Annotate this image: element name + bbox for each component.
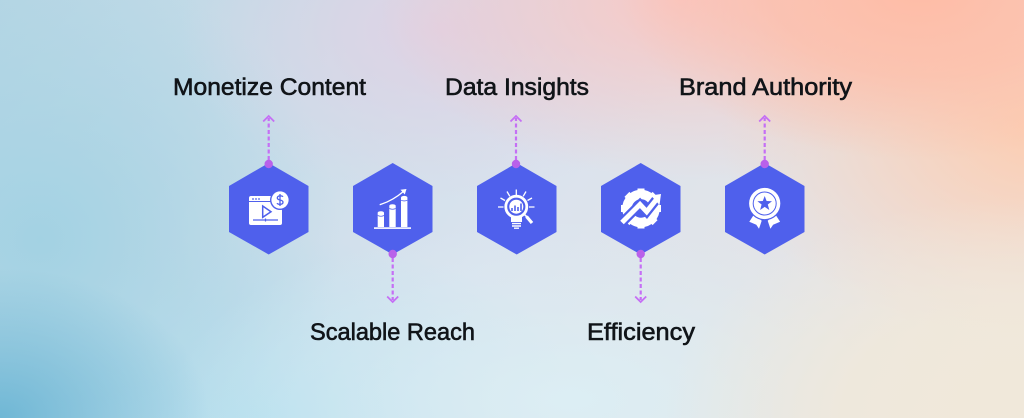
hexagon: Monetize Content: [229, 163, 308, 254]
heading: Scalable Reach: Scalable Reach: [310, 319, 475, 346]
hexagon: Data Insights: [477, 163, 556, 254]
heading: Monetize Content: Monetize Content: [173, 74, 366, 101]
heading: Data Insights: Data Insights: [445, 74, 589, 101]
hexagon: Scalable Reach: [353, 163, 432, 254]
arrow up: Monetize Content: [263, 116, 274, 168]
arrow down: Efficiency: [635, 250, 646, 302]
icon: video with dollar: [249, 190, 290, 225]
icon: gear with zigzag arrow: [621, 188, 661, 228]
arrow up: Brand Authority: [759, 116, 770, 168]
heading: Efficiency: Efficiency: [587, 319, 695, 346]
icon: award medal with star: [748, 187, 782, 229]
arrow down: Scalable Reach: [387, 250, 398, 302]
icon: light bulb with magnifier: [498, 190, 534, 228]
hexagon: Brand Authority: [725, 163, 804, 254]
arrow up: Data Insights: [510, 116, 522, 168]
hexagon: Efficiency: [601, 163, 680, 254]
icon: growth bar chart: [374, 189, 411, 229]
heading: Brand Authority: Brand Authority: [679, 74, 852, 101]
